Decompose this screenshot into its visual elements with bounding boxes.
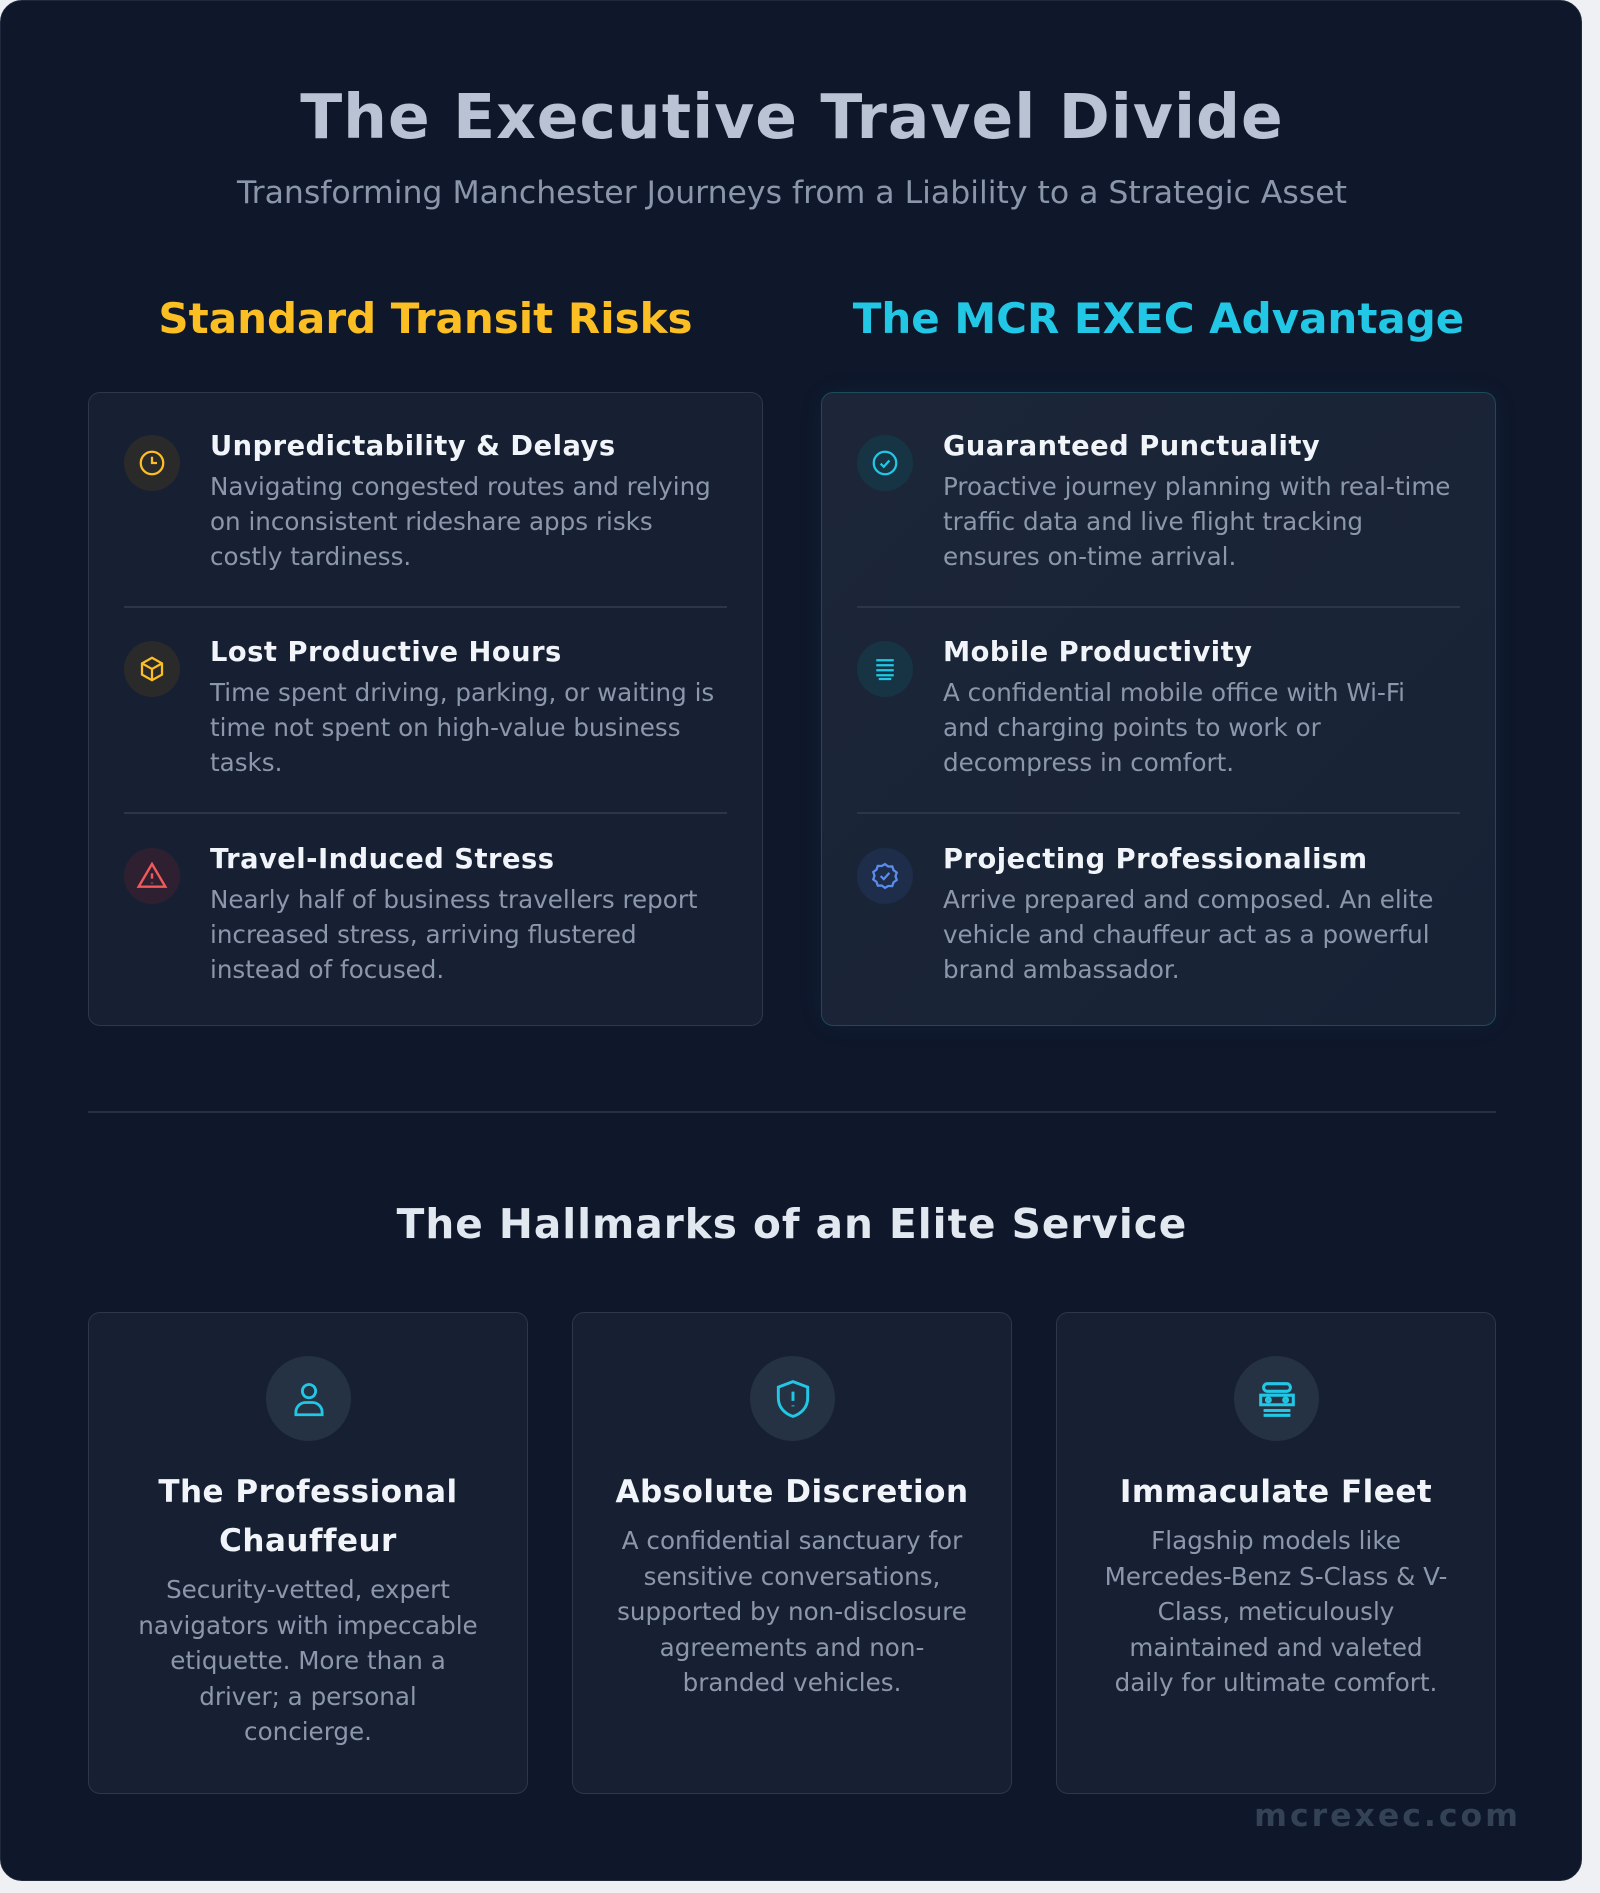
item: productivity: decompress in comfort. [943, 748, 1234, 777]
panel: chauffeur: Chauffeur [219, 1523, 397, 1559]
panel: fleet: daily for ultimate comfort. [1115, 1668, 1437, 1697]
item: lost hours: Lost Productive Hours [210, 637, 562, 668]
item: stress: increased stress, arriving flustered [210, 920, 637, 949]
item: punctuality [857, 431, 1450, 571]
item: productivity [857, 637, 1405, 777]
heading: MCR EXEC advantage: The MCR EXEC Advantage [853, 294, 1464, 343]
panel: discretion: branded vehicles. [683, 1668, 901, 1697]
icon: check circle [857, 435, 913, 491]
panel: chauffeur [88, 1312, 528, 1794]
icon: lines [857, 641, 913, 697]
panel: advantage [821, 392, 1496, 1026]
panel: chauffeur: etiquette. More than a [170, 1646, 446, 1675]
icon: clock [124, 435, 180, 491]
icon: shield [750, 1356, 835, 1441]
item: punctuality: Guaranteed Punctuality [943, 431, 1320, 462]
panel: chauffeur: The Professional [158, 1474, 458, 1510]
item: productivity: Mobile Productivity [943, 637, 1252, 668]
footer: website: mcrexec.com [1254, 1798, 1521, 1834]
icon: cube [124, 641, 180, 697]
icon: warning [124, 848, 180, 904]
heading: hallmarks: The Hallmarks of an Elite Service [397, 1200, 1187, 1248]
panel: discretion: A confidential sanctuary for [622, 1526, 962, 1555]
item: professionalism [857, 844, 1433, 984]
item: punctuality: traffic data and live flight tracking [943, 507, 1363, 536]
item: professionalism: Arrive prepared and composed. An elite [943, 885, 1433, 914]
item: lost hours: time not spent on high-value business [210, 713, 681, 742]
item: stress: Nearly half of business travellers report [210, 885, 698, 914]
panel: fleet: Flagship models like [1151, 1526, 1401, 1555]
item: productivity: A confidential mobile office with Wi-Fi [943, 678, 1405, 707]
item: lost hours: Time spent driving, parking, or waiting is [210, 678, 714, 707]
panel: discretion: supported by non-disclosure [617, 1597, 967, 1626]
item: professionalism: vehicle and chauffeur act as a powerful [943, 920, 1430, 949]
panel: fleet: maintained and valeted [1129, 1632, 1423, 1662]
panel: discretion: agreements and non- [660, 1632, 924, 1662]
panel: discretion: sensitive conversations, [644, 1562, 940, 1590]
item: stress [124, 844, 698, 984]
item: unpredictability [124, 431, 711, 571]
panel: chauffeur: driver; a personal [199, 1682, 417, 1710]
item: punctuality: ensures on-time arrival. [943, 542, 1236, 571]
panel: discretion [572, 1312, 1012, 1794]
panel: chauffeur: concierge. [244, 1717, 372, 1746]
panel: fleet: Class, meticulously [1158, 1597, 1394, 1626]
item: punctuality: Proactive journey planning with real-time [943, 472, 1450, 501]
item: professionalism: Projecting Professionalism [943, 844, 1368, 875]
title: The Executive Travel Divide [300, 81, 1284, 153]
item: unpredictability: on inconsistent rideshare apps risks [210, 507, 653, 536]
panel: chauffeur: navigators with impeccable [138, 1610, 478, 1640]
icon: person [266, 1356, 351, 1441]
heading: standard transit risks: Standard Transit Risks [158, 294, 693, 343]
icon: badge [857, 848, 913, 904]
item: productivity: and charging points to work or [943, 713, 1321, 742]
panel: fleet [1056, 1312, 1496, 1794]
item: stress: instead of focused. [210, 955, 444, 984]
panel: fleet: Immaculate Fleet [1120, 1474, 1432, 1510]
panel: discretion: Absolute Discretion [615, 1474, 969, 1510]
item: stress: Travel-Induced Stress [210, 844, 554, 875]
subtitle: Transforming Manchester Journeys from a Liability to a Strategic Asset [237, 175, 1347, 211]
icon: car [1234, 1356, 1319, 1441]
panel: risks [88, 392, 763, 1026]
panel: chauffeur: Security-vetted, expert [166, 1575, 450, 1604]
item: professionalism: brand ambassador. [943, 955, 1180, 984]
item: unpredictability: Navigating congested routes and relying [210, 472, 711, 501]
item: lost hours: tasks. [210, 748, 282, 777]
item: unpredictability: costly tardiness. [210, 542, 411, 571]
panel: fleet: Mercedes-Benz S-Class & V- [1105, 1562, 1447, 1590]
item: lost hours [124, 637, 714, 777]
item: unpredictability: Unpredictability & Delays [210, 431, 616, 462]
